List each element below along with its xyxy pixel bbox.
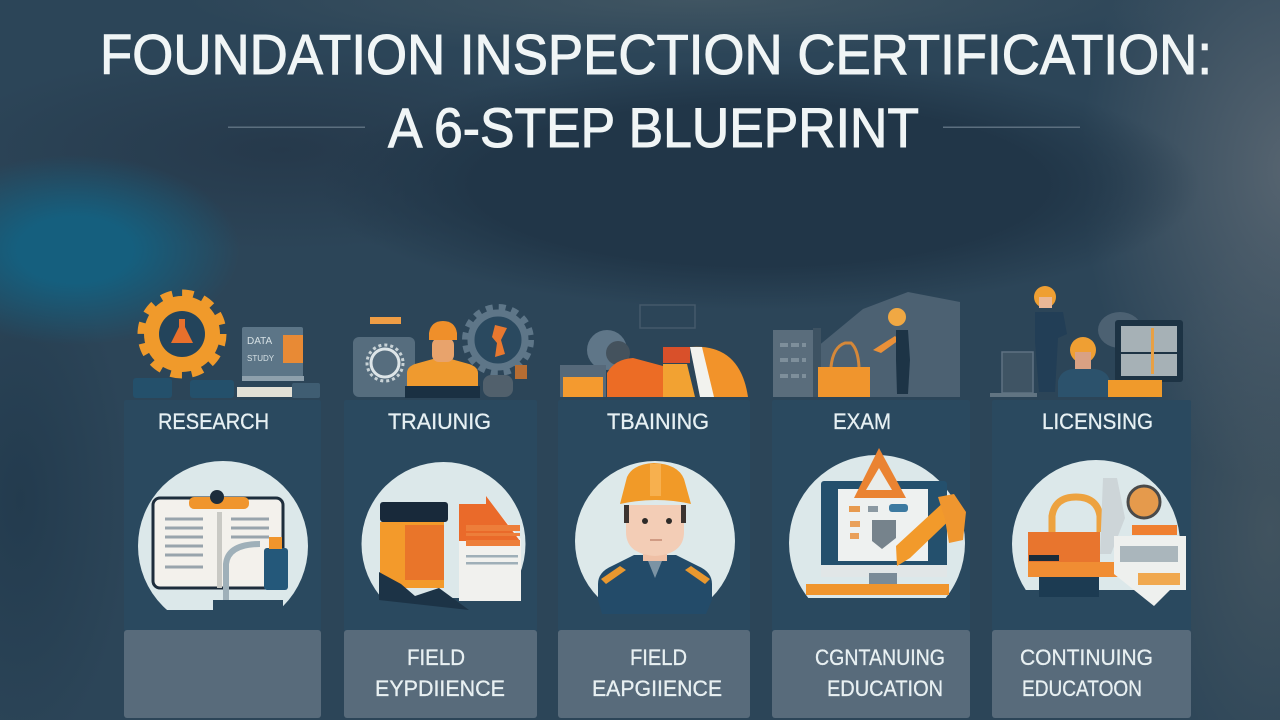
heading: licensing: LICENSING bbox=[1042, 409, 1153, 434]
icon: laptop with data: STUDY bbox=[247, 354, 275, 363]
heading: training second: TBAINING bbox=[607, 409, 709, 434]
body: continuing education: CGNTANUING bbox=[815, 645, 945, 670]
body: field experience second: FIELD bbox=[630, 645, 687, 670]
icon: books bbox=[133, 378, 320, 398]
body: field experience bbox=[375, 645, 505, 701]
body: continuing education second: CONTINUING bbox=[1020, 645, 1153, 670]
panel: exam bbox=[772, 292, 970, 718]
icon: laptop with data bbox=[242, 327, 304, 381]
icon: worker bbox=[405, 321, 480, 398]
panel: training second bbox=[558, 305, 750, 718]
icon: inspectors and monitor bbox=[990, 286, 1183, 397]
title bbox=[100, 23, 1212, 159]
title: FOUNDATION INSPECTION CERTIFICATION: bbox=[100, 23, 1212, 87]
icon: documents in circle bbox=[344, 462, 537, 630]
icon: building and inspector bbox=[773, 292, 960, 397]
icon: gear bbox=[143, 295, 221, 373]
icon: hard hat pile bbox=[560, 305, 748, 397]
body: continuing education second: EDUCATOON bbox=[1022, 676, 1142, 701]
body: field experience second: EAPGIIENCE bbox=[592, 676, 722, 701]
body: continuing education: EDUCATION bbox=[827, 676, 943, 701]
heading: research: RESEARCH bbox=[158, 409, 269, 434]
title: A 6-STEP BLUEPRINT bbox=[388, 96, 919, 159]
heading: training: TRAIUNIG bbox=[388, 409, 491, 434]
icon: open book in circle bbox=[138, 461, 308, 610]
icon: monitor with exam bbox=[789, 448, 966, 598]
panel: licensing bbox=[990, 286, 1191, 718]
heading: exam: EXAM bbox=[833, 409, 891, 434]
icon: laptop with data: DATA bbox=[247, 336, 273, 347]
body: field experience second bbox=[592, 645, 722, 701]
icon: toolbag and reports bbox=[1012, 460, 1186, 630]
panel: training bbox=[344, 307, 537, 718]
panel: research bbox=[124, 295, 321, 718]
body: continuing education bbox=[815, 645, 945, 701]
icon: worker portrait bbox=[575, 461, 736, 630]
body: continuing education second bbox=[1020, 645, 1153, 701]
icon: gray gear bbox=[465, 307, 531, 397]
icon: jar with gear bbox=[353, 317, 415, 397]
body: field experience: EYPDIIENCE bbox=[375, 676, 505, 701]
body: field experience: FIELD bbox=[407, 645, 465, 670]
